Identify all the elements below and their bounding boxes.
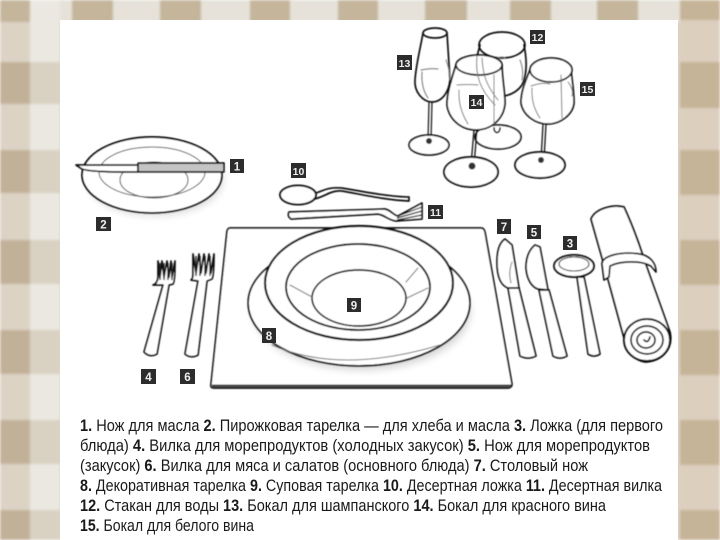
illustration: table setting — [76, 28, 671, 388]
label 2 — [96, 217, 111, 232]
label 7: 7 — [501, 222, 507, 234]
label 3: 3 — [567, 238, 573, 250]
illustration: wine glass 13 champagne — [409, 28, 450, 155]
label 6: 6 — [184, 372, 191, 384]
illustration: water glass 12 — [475, 32, 526, 149]
text block: legend — [80, 417, 663, 535]
label 14 — [469, 95, 484, 109]
label 3 — [563, 236, 577, 250]
illustration: soup spoon — [554, 255, 600, 356]
label 1 — [230, 159, 244, 174]
label 10: 10 — [293, 166, 304, 178]
label 9 — [347, 298, 361, 312]
text block: legend: 15. Бокал для белого вина — [80, 517, 255, 535]
label 11: 11 — [430, 207, 441, 219]
illustration: bread plate with butter knife — [76, 137, 224, 216]
label 6 — [180, 369, 195, 384]
text block: legend: 8. Декоративная тарелка 9. Суповая тарелка 10. Десертная ложка 11. Десертная вилка — [80, 477, 663, 495]
label 7 — [497, 219, 511, 234]
label 13 — [397, 55, 412, 70]
label 15 — [580, 82, 595, 96]
label 8 — [262, 328, 276, 343]
label 5: 5 — [531, 228, 538, 240]
label 13: 13 — [399, 58, 410, 70]
label 14: 14 — [471, 97, 482, 109]
label 2: 2 — [100, 220, 107, 232]
illustration: table knife — [497, 239, 536, 358]
illustration: white wine glass 15 — [515, 58, 574, 178]
label 8: 8 — [266, 331, 273, 343]
text block: legend: 12. Стакан для воды 13. Бокал для шампанского 14. Бокал для красного вина — [80, 497, 607, 515]
illustration: seafood fork — [144, 261, 175, 356]
illustration: placemat — [211, 228, 512, 388]
label 4: 4 — [145, 372, 152, 384]
label 10 — [291, 163, 306, 178]
illustration: meat fork — [185, 254, 214, 357]
illustration: seafood knife — [526, 245, 567, 358]
text block: legend: (закусок) 6. Вилка для мяса и салатов (основного блюда) 7. Столовый нож — [80, 457, 588, 475]
label 4 — [141, 369, 156, 384]
label 9: 9 — [351, 300, 357, 312]
label 15: 15 — [582, 84, 593, 96]
illustration: dessert fork — [288, 203, 422, 221]
label 12: 12 — [532, 32, 543, 44]
text block: legend: 1. Нож для масла 2. Пирожковая тарелка — для хлеба и масла 3. Ложка (для первого — [80, 417, 663, 435]
illustration: placemat front edge — [212, 384, 511, 388]
illustration: decorative and soup plates — [248, 226, 470, 370]
illustration: dessert spoon — [280, 186, 409, 204]
label 5 — [527, 225, 541, 240]
label 1: 1 — [234, 162, 241, 174]
illustration: rolled napkin — [591, 206, 671, 362]
label 12 — [530, 30, 545, 44]
illustration: red wine glass 14 — [444, 55, 505, 187]
text block: legend: блюда) 4. Вилка для морепродуктов (холодных закусок) 5. Нож для морепродуктов — [80, 437, 650, 455]
label 11 — [428, 205, 443, 219]
